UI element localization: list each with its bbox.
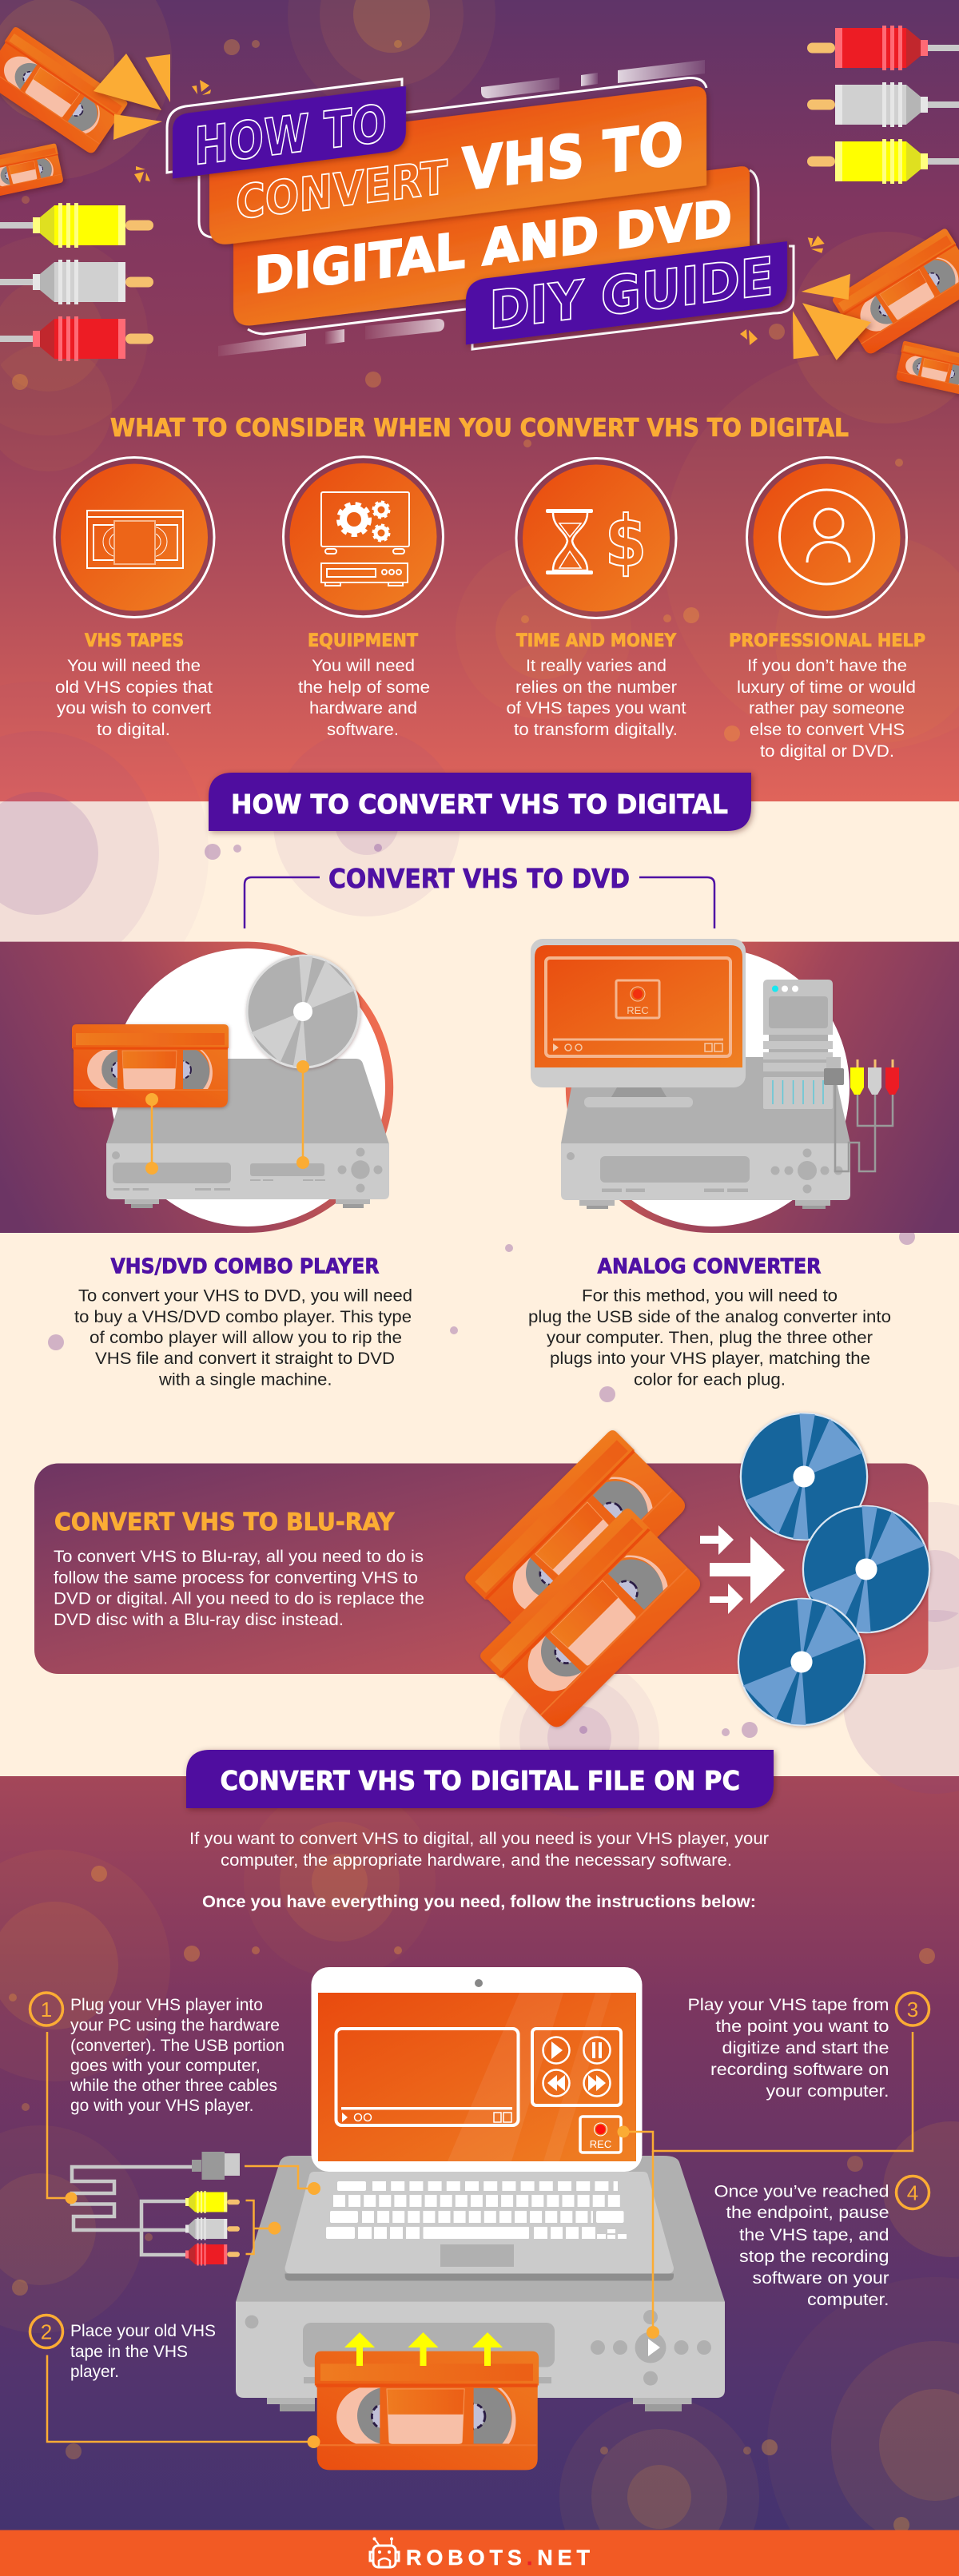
illustration: VHS player [236, 2156, 725, 2411]
step 4 badge: 4 [907, 2181, 918, 2205]
step 3 text: digitize and start the [722, 2039, 889, 2057]
title banner: orange 2 [233, 165, 750, 328]
step 2 text: tape in the VHS [70, 2343, 188, 2361]
step 3 text: the point you want to [716, 2017, 889, 2036]
bracket [245, 877, 714, 928]
step 1 text: goes with your computer, [70, 2057, 261, 2075]
player body [561, 1057, 850, 1209]
text: combo player: VHS file and convert it straight to DVD [95, 1350, 395, 1368]
heading: professional help: PROFESSIONAL HELP [729, 631, 925, 651]
illustration: tapes [463, 1428, 705, 1733]
text: blu-ray: DVD disc with a Blu-ray disc instead. [54, 1611, 344, 1629]
text: professional help: If you don’t have the [747, 657, 907, 675]
step 4 badge [897, 2176, 929, 2208]
step 1 text: go with your VHS player. [70, 2097, 254, 2115]
banner: convert vhs to digital file on pc [186, 1750, 774, 1808]
text: intro: computer, the appropriate hardware, and the necessary software. [221, 1851, 732, 1870]
step 2 text [70, 2322, 216, 2381]
text: intro [189, 1830, 769, 1911]
text: VHS tapes: You will need the [67, 657, 201, 675]
step 4 text: the endpoint, pause [726, 2204, 889, 2222]
step 2 text: player. [70, 2363, 119, 2381]
banner: how to convert vhs to digital [209, 773, 751, 831]
RCA plugs: left group [0, 203, 153, 361]
logo text: ROBOTS.NET [406, 2546, 590, 2570]
text: professional help: rather pay someone [749, 699, 905, 718]
step 1 [30, 1993, 320, 2254]
text: combo player: to buy a VHS/DVD combo player. This type [74, 1308, 412, 1326]
step 4 text: computer. [807, 2291, 889, 2309]
title: how to: HOW TO [194, 94, 387, 177]
record button: REC [590, 2138, 611, 2150]
background: bottom section [0, 1776, 959, 2531]
step 4 text: stop the recording [739, 2248, 889, 2266]
text: time and money: It really varies and [526, 657, 667, 675]
arrows [700, 1525, 785, 1614]
monitor: REC [627, 1004, 649, 1016]
text: analog converter: plug the USB side of the analog converter into [528, 1308, 891, 1326]
panel: time and money [507, 459, 686, 739]
step 2 [30, 2316, 320, 2448]
circle: right white [575, 948, 850, 1226]
title: vhs to: VHS TO [462, 109, 683, 205]
illustration: analog converter [531, 939, 899, 1209]
text: blu-ray: To convert VHS to Blu-ray, all you need to do is [54, 1548, 424, 1566]
step 3 [617, 1993, 929, 2151]
heading: analog converter: ANALOG CONVERTER [598, 1254, 822, 1278]
icon: person badge [746, 457, 906, 617]
video player window [336, 2029, 518, 2125]
title: convert: CONVERT [236, 150, 448, 230]
text: combo player [74, 1287, 412, 1389]
text: equipment: the help of some [298, 678, 430, 697]
step 3 text: recording software on [710, 2061, 889, 2079]
heading: time and money: TIME AND MONEY [516, 631, 677, 651]
step 1 text: Plug your VHS player into [70, 1996, 263, 2014]
step 3 badge: 3 [907, 1998, 918, 2021]
text: equipment: software. [327, 721, 399, 739]
text: combo player: of combo player will allow you to rip the [90, 1329, 402, 1347]
keyboard [326, 2181, 627, 2239]
title: diy guide: DIY GUIDE [489, 245, 774, 342]
text: VHS tapes: you wish to convert [57, 699, 211, 718]
heading: what to consider: WHAT TO CONSIDER WHEN YOU CONVERT VHS TO DIGITAL [110, 414, 849, 443]
text: equipment [298, 657, 430, 739]
orange shards: left [94, 54, 211, 183]
icon: equipment badge [283, 457, 443, 617]
step 3 text [687, 1996, 889, 2101]
step 4 text: software on your [753, 2269, 889, 2288]
text: analog converter [528, 1287, 891, 1389]
title banner: diy guide [466, 241, 787, 344]
trackpad [440, 2244, 514, 2267]
disc [247, 956, 359, 1067]
band: left illustration background [0, 942, 393, 1233]
orange shards: right [740, 236, 871, 360]
text: analog converter: For this method, you will need to [582, 1287, 838, 1306]
text: blu-ray: follow the same process for converting VHS to [54, 1569, 418, 1588]
panel: blu-ray [34, 1464, 929, 1674]
illustration: laptop [285, 1967, 674, 2280]
band: right illustration background [566, 942, 959, 1233]
step 4 connector [647, 2151, 659, 2339]
text: combo player: To convert your VHS to DVD, you will need [78, 1287, 412, 1306]
illustration: converter cables [72, 2152, 240, 2266]
title outlines and streaks [167, 60, 794, 356]
icon: hourglass and dollar badge: $ [605, 500, 647, 582]
bokeh: cream section [0, 682, 959, 1818]
text: analog converter: color for each plug. [634, 1371, 786, 1389]
step 4 text [714, 2183, 889, 2309]
step 1 text: while the other three cables [70, 2077, 277, 2095]
step 3 text: Play your VHS tape from [687, 1996, 889, 2014]
step 4 text: the VHS tape, and [739, 2226, 889, 2244]
title: digital and dvd: DIGITAL AND DVD [254, 189, 732, 305]
panel: equipment [283, 457, 443, 739]
background: cream section [0, 801, 959, 1777]
illustration: VHS tape with arrows [315, 2332, 539, 2470]
playback controls [532, 2029, 621, 2105]
icon: hourglass and dollar badge [516, 459, 676, 618]
VHS tapes: right [831, 228, 959, 396]
bokeh: bottom section [0, 1786, 959, 2576]
step 1 badge [30, 1993, 62, 2025]
step 2 badge: 2 [41, 2320, 52, 2344]
step 1 connector [47, 2032, 320, 2254]
step 1 badge: 1 [41, 1998, 52, 2021]
tape [72, 1024, 229, 1107]
icon: robot logo [370, 2538, 399, 2567]
text: equipment: You will need [312, 657, 415, 675]
text: VHS tapes [55, 657, 213, 739]
step 1 text [70, 1996, 285, 2115]
text: time and money: relies on the number [515, 678, 677, 697]
title block [173, 39, 787, 380]
text: VHS tapes: old VHS copies that [55, 678, 213, 697]
circle: left white [110, 948, 385, 1226]
text: professional help: else to convert VHS [750, 721, 905, 739]
heading: combo player: VHS/DVD COMBO PLAYER [110, 1254, 379, 1278]
text: professional help: luxury of time or would [737, 678, 916, 697]
cables [824, 1057, 899, 1171]
illustration: VHS/DVD combo player [72, 956, 389, 1208]
step 2 connector [47, 2355, 320, 2448]
step 2 text: Place your old VHS [70, 2322, 216, 2340]
text: analog converter: your computer. Then, plug the three other [547, 1329, 873, 1347]
step 1 text: (converter). The USB portion [70, 2037, 285, 2055]
laptop lid [312, 1967, 643, 2172]
combo player body [106, 1059, 389, 1208]
text: professional help: to digital or DVD. [760, 742, 894, 761]
VHS tapes: top left [0, 26, 129, 198]
monitor [531, 939, 746, 1107]
heading: equipment: EQUIPMENT [308, 631, 418, 651]
text: equipment: hardware and [309, 699, 417, 718]
banner: convert vhs to digital file on pc: CONVERT VHS TO DIGITAL FILE ON PC [221, 1765, 740, 1796]
heading: convert vhs to dvd: CONVERT VHS TO DVD [328, 863, 630, 894]
laptop base [285, 2172, 674, 2280]
text: time and money: to transform digitally. [514, 721, 678, 739]
text: time and money: of VHS tapes you want [507, 699, 686, 718]
text: intro: If you want to convert VHS to digital, all you need is your VHS player, your [189, 1830, 769, 1848]
background: top section [0, 0, 959, 801]
title banner: orange 1 [209, 85, 706, 246]
panel: VHS tapes [54, 457, 214, 739]
step 3 connector [617, 2032, 913, 2151]
text: professional help [737, 657, 916, 761]
RCA plugs: right group [807, 26, 959, 184]
panel: professional help [729, 457, 925, 761]
icon: VHS tape badge [54, 457, 214, 617]
heading: blu-ray: CONVERT VHS TO BLU-RAY [54, 1509, 396, 1536]
tower [763, 980, 833, 1109]
text: blu-ray [54, 1548, 424, 1629]
text: blu-ray: DVD or digital. All you need to do is replace the [54, 1590, 424, 1608]
bokeh: top section [0, 0, 959, 751]
step 2 badge [30, 2316, 62, 2347]
illustration: blu-ray discs [738, 1413, 929, 1725]
heading: VHS tapes: VHS TAPES [85, 631, 184, 651]
record button [580, 2117, 621, 2153]
text: combo player: with a single machine. [158, 1371, 332, 1389]
step 4 text: Once you’ve reached [714, 2183, 889, 2200]
step 3 badge [897, 1993, 929, 2025]
text: analog converter: plugs into your VHS player, matching the [550, 1350, 870, 1368]
step 3 text: your computer. [766, 2082, 889, 2101]
banner: how to convert vhs to digital: HOW TO CONVERT VHS TO DIGITAL [231, 789, 728, 820]
step 1 text: your PC using the hardware [70, 2017, 280, 2035]
text: time and money [507, 657, 686, 739]
text: VHS tapes: to digital. [97, 721, 170, 739]
footer [0, 2530, 959, 2576]
connector lines [145, 1060, 309, 1175]
step 4 [647, 2151, 929, 2339]
title banner: how to [173, 86, 406, 178]
text: intro: Once you have everything you need, follow the instructions below: [202, 1893, 756, 1911]
